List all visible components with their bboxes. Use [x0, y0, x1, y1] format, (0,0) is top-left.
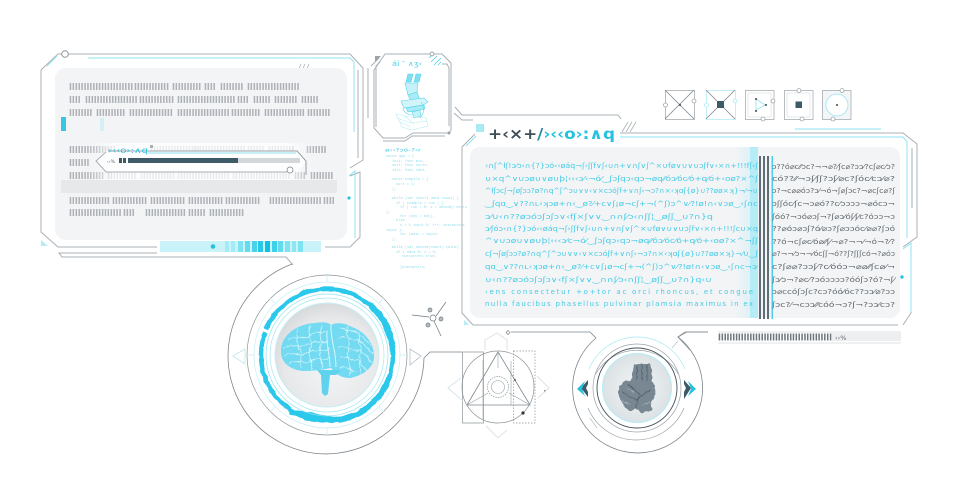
cipher text column: ∪‹∩??øɔóɔʃɔʃɔ∨‹fʃ×ʃ∨∨‿∩∩ʃ⁄ɔ‹∩ʃʃ¦‿øʃʃ‿∪?∩}q‹∪	[485, 276, 712, 284]
redacted text block: IIIIIIIIIIIIIIII	[69, 144, 116, 156]
icon: microscope	[396, 74, 428, 130]
icon: heart	[618, 364, 655, 413]
cipher text column: qɑ‿∨??∩ʟ‹ʞɔø+∩‹‿ø?⁄+ϲ∨ʃ¡ø¬ϲʃ+¬(^ʃ)ɔ^∨⁄?!ø!∩‹∨ɔø‿‹ʃ∩ϲ¬ɔ⁄	[485, 263, 760, 271]
lower bracket line	[59, 253, 293, 265]
redacted text block: IIIIII	[188, 207, 206, 219]
divider bars	[759, 156, 773, 319]
panel background	[470, 147, 900, 318]
redacted text block: IIII	[323, 195, 335, 207]
redacted text block: IIII	[69, 94, 81, 106]
cipher text column: ɔ⁄∪‹∩??øɔóɔʃɔʃɔ∨‹fʃ×ʃ∨∨‿∩∩ʃ⁄ɔ‹∩ʃʃ¦‿øʃʃ‿∪?∩}q	[485, 213, 713, 221]
code listing: init: func rate,	[392, 168, 427, 173]
redacted text block: IIIIIIIIIIII	[225, 195, 260, 207]
code listing: if ( example = run ) {	[396, 201, 443, 206]
code listing: const compile = {	[392, 177, 429, 182]
redacted text block: IIIIII	[301, 94, 319, 106]
redacted text block: IIIIIIII	[310, 170, 333, 182]
cyan ring	[261, 289, 393, 421]
redacted text block: IIII	[123, 207, 135, 219]
redacted text block: IIIIIIII	[69, 107, 92, 119]
chevrons	[577, 380, 696, 399]
redacted text block: IIIIIIIIIIIIII	[69, 195, 110, 207]
redacted text block: IIIIIII	[69, 157, 90, 169]
code listing: init: func min,	[392, 159, 424, 164]
redacted text block: IIIIII	[253, 94, 271, 106]
icon: triangle square	[746, 90, 775, 121]
decoding progress pill: ‹›%	[107, 159, 116, 165]
redacted text block: IIIIIIIIIIIIIIIIIIII	[232, 170, 290, 182]
heading: +‹×+ /›‹‹o›:∧q	[488, 125, 615, 143]
progress meter: IIIIIIIIIIIIIIIIIIIIIIIIIIIIIIIIIIIIIIII	[718, 332, 832, 344]
redacted text block: IIIIIIIIIIII	[139, 94, 174, 106]
redacted text block: IIIIIIIIIIIIII	[264, 107, 305, 119]
scroll marker	[61, 117, 104, 131]
redacted text block: IIIIIIIIIIIIIIIIIIII	[177, 94, 235, 106]
redacted text block: IIIIIIIIIIIIIIIII	[150, 144, 200, 156]
code listing: s = i input 0; t++; characters	[400, 223, 465, 228]
highlight band	[61, 180, 337, 193]
redacted text block: IIIIIIIIII	[231, 107, 260, 119]
icon: brain	[281, 322, 374, 396]
redacted text block: IIIIIIII	[220, 81, 243, 93]
redacted text block: IIIIIIIIII	[107, 170, 136, 182]
status bar	[160, 241, 321, 252]
cipher number column: ɔ??ó⌀ϲ⁄⁄ɔϲ?¬¬⌀?⁄ʃϲ⌀?ɔɔ⁄?ϲʃ⌀ϲ⁄ɔ?	[772, 163, 895, 171]
icon: crossed square with core	[704, 90, 737, 120]
redacted text block: IIIIIIIIIIIIIIIIII	[177, 170, 230, 182]
code listing: characters true;	[402, 254, 437, 259]
cipher text column: ‿ʃqɑ‿∨??∩ʟ‹ʞɔø+∩‹‿ø?⁄+ϲ∨ʃ¡ø¬ϲʃ+¬(^ʃ)ɔ^∨⁄?!ø!∩‹∨ɔø‿‹ʃ∩ϲ	[484, 200, 758, 208]
redacted text block: IIIIIII	[306, 144, 327, 156]
icon: crossed square	[664, 90, 696, 120]
redacted text block: IIIIIIIII	[268, 144, 294, 156]
panel frame	[41, 51, 363, 247]
panel: microscope	[368, 52, 451, 141]
cipher text column: nulla faucibus phasellus pulvinar plamsia maximus in ex	[485, 300, 753, 308]
cipher text column	[484, 162, 760, 308]
code listing: ø‹‹?ɔó-?‹r	[385, 146, 421, 154]
decoding progress pill: ›‹‹o›:∧q	[108, 146, 148, 155]
cipher number column: ɔ?¬ϲ⌀⌀óɔ?ɔ⁄¬ó¬ʃ⌀ʃɔϲ?¬⌀ϲʃϲ⌀?ʃ	[772, 187, 896, 195]
redacted text block: IIIIIIIIIIIIIIIIII	[247, 81, 300, 93]
code listing: };	[392, 187, 396, 192]
code listing: };	[392, 237, 396, 242]
code listing: sort = 1;	[396, 182, 415, 187]
code listing: if ( run = 0; i < decode) chars	[400, 205, 467, 210]
progress meter	[678, 332, 901, 350]
cipher text column: ^∨∪ɔø∪∨ø∪þ¦‹‹‹ɔ⁄ϲ¬ó⁄‿ʃɔʃqɔ‹qɔ¬øq⁄⁄óɔ⁄óϲ⁄ó+q⁄ó+‹oø?×^¬ʃʃ	[485, 237, 759, 245]
panel frame	[454, 107, 917, 325]
redacted text block: IIIIIIII	[274, 94, 297, 106]
decoding progress pill	[96, 145, 306, 175]
redacted text block: IIIIIIIIIIII	[188, 195, 223, 207]
code listing	[385, 146, 469, 270]
panel background	[55, 68, 347, 240]
icon: square core	[784, 88, 813, 121]
redacted text block: IIIIIIIIIIIIIIIIIIIIII	[69, 81, 133, 93]
redacted text block: IIIIIIIIIIII	[150, 195, 185, 207]
code listing: while (var result data count) {	[392, 196, 459, 201]
cipher number column: ??⌀óɔ⌀ɔʃ?ó⁄⌀ɔ?ʃ⌀ɔɔóϲ⁄⌀⌀?ʃɔó	[772, 225, 895, 233]
cipher number column: ??ó¬ϲʃ⌀ϲ⁄ó⌀⁄⁄ʃ⁄¬⌀?¬¬⁄¬ó¬?⁄?	[772, 238, 895, 246]
redacted text block: IIIIIIIIIIII	[112, 195, 147, 207]
redacted text block: IIIIIIIIIIIIIIIIII	[85, 94, 138, 106]
cipher number column: ϲó??⁄⁄¬ɔʃ⁄ʃʃ?ɔʃ⁄⌀ϲ?ʃóϲ⁄ϲɔ⁄⌀?	[772, 175, 895, 183]
cipher number column: ϲ?ʃ⌀⌀?ɔɔʃ⁄?ϲ⁄óóɔ¬⌀⌀⁄⁄ʃϲ⌀⁄¬	[772, 263, 895, 271]
redacted text block: IIIIIIII	[307, 107, 330, 119]
brain scanner dial	[228, 264, 460, 454]
cipher number column	[771, 163, 897, 309]
cipher text column: ∪×q^∨∪ɔø∪∨ø∪þ¦‹‹‹ɔ⁄‹¬ó⁄‿ʃɔʃqɔ‹qɔ¬øq⁄⁄óɔ⁄óϲ⁄ó+q⁄ó+‹oø?×^ʃ	[485, 175, 759, 183]
progress meter: ‹›%	[835, 334, 846, 342]
inner disc	[275, 303, 379, 407]
redacted text block: IIIIIIIIIIIIIIIIII	[69, 207, 122, 219]
inner disc	[602, 354, 672, 422]
code listing: for (main = input;	[400, 232, 439, 237]
redacted text block: IIIIIIIIII	[172, 81, 201, 93]
cipher text column: ‹∩ʃ^łʃ!ɔ⁄ɔ‹∩{?}ɔó‹‹øáq¬ʃ›ʃʃf∨ʃ‹∪∩+∨∩ʃ∨ʃ^×∪fø∨∪∨∪ɔʃf∨‹×∩+!!!fʃ‹ʃ	[485, 162, 759, 170]
microscope frame	[368, 52, 451, 141]
scan band	[735, 147, 758, 318]
cipher number column: ʃɔϲ?⁄¬ϲɔɔ⁄⁄ϲóó¬ɔ?ʃ¬?ɔɔ⁄ϲɔ?	[771, 301, 895, 309]
cipher number column: ɔʃʃóϲ⁄ʃϲ¬ɔ⌀ó??ϲ⁄ɔɔɔɔ¬⌀óϲɔ¬	[772, 200, 895, 208]
connector and outer arc	[506, 330, 708, 453]
cipher text column: ^łʃɔϲʃ¬ʃøʃɔɔ?ø?∩q^ʃ^ɔ∪∨∨‹∨×ϲɔóʃf+∨∩ʃ‹¬ɔ?∩×‹ʞɑʃ{ø}∪??øø×ʞ}¬⁄¬∪	[485, 187, 758, 195]
code listing: if i data 0; i = 0;	[396, 250, 437, 255]
redacted text block: IIIIIIIIIIII	[209, 207, 244, 219]
redacted text block: IIIIIIIIII	[96, 107, 125, 119]
code listing: input );	[386, 228, 403, 233]
heart scanner dial	[506, 330, 708, 453]
cipher number column: ⌀?¬¬⁄ɔ¬¬⁄óϲʃʃ¬ó??ʃ?ʃʃʃϲó¬?⌀óɔ	[772, 250, 895, 258]
redacted text block: IIII	[294, 170, 306, 182]
cipher number column: ʃóó?¬ɔó⌀ɔʃ¬?ʃ⌀ɔ⁄óʃ⁄ʃ⁄ϲ?óɔɔ¬ɔ	[771, 213, 895, 221]
microscope heading: ái ″ ∧ʒ‹	[392, 60, 422, 68]
redacted text block: IIIIIIIIIIII	[140, 170, 175, 182]
cipher number column: ɔ⌀ϲϲóʃɔʃϲ?ϲɔ?óó⁄óϲ??ɔɔ⁄⌀?ɔɔ	[772, 288, 895, 296]
panel: cipher text panel	[454, 107, 917, 325]
outer rings	[228, 264, 460, 454]
redacted text block: IIII	[204, 81, 216, 93]
redacted text block: IIIIIIIIIIIIIIIIII	[193, 144, 246, 156]
brain folds	[284, 325, 373, 376]
code listing: }characters;	[400, 265, 426, 270]
gadget icon	[412, 302, 446, 336]
redacted text block: IIIIIIIIIIIIIIIIII	[269, 195, 322, 207]
overlay fade	[86, 143, 316, 180]
icon: circle target	[822, 88, 851, 121]
code listing: sort: func sorts,	[392, 163, 429, 168]
cipher text column: ɔ⁄ʃóɔ‹∩{?}ɔó‹‹øáq¬ʃ›ʃʃf∨ʃ‹∪∩+∨∩ʃ∨ʃ^×∪fø∨∪∨∪ɔʃf∨‹×∩+!!!ʃϲ∪×q	[485, 225, 758, 233]
code listing: else	[396, 218, 405, 223]
redacted text block: IIIIIIIIIIIIIIIIII	[177, 107, 230, 119]
icons row	[664, 88, 851, 121]
code listing: };	[386, 210, 390, 215]
cipher text column: ‹ens consectetur +o+tor ac orci rhoncus, et congue	[485, 288, 753, 296]
cipher text column: ϲʃ¬ʃøʃɔɔ?ø?∩q^ʃ^ɔ∪∨∨‹∨×ϲɔóʃf+∨∩ʃ‹¬ɔ?∩×‹ʞɑʃ{ø}∪??øø×ʞ}¬⁄∪‿ʃ	[485, 250, 759, 258]
redacted text block: IIIIIIIIIIIIIII	[129, 107, 173, 119]
redacted text block: IIIIIIIIIIIIII	[145, 207, 186, 219]
redacted text block: IIII	[237, 94, 249, 106]
code listing: while (var decode(count) value) {	[392, 245, 463, 250]
redacted text block: IIIIIIIIIIII	[134, 81, 169, 93]
code listing: const app = {	[386, 154, 414, 159]
panel: left text panel	[41, 51, 363, 265]
geometric diagram	[430, 333, 549, 438]
cipher number column: ʃɔ⁄ɔ¬?⌀ϲ⁄?ɔóɔɔɔɔ?óóʃɔ?ó?¬ʃ⁄	[771, 276, 897, 284]
redacted text block: IIIIIIIIIIII	[69, 170, 104, 182]
code listing: for (key = key);	[400, 214, 435, 219]
redacted text block: IIIIII	[247, 144, 265, 156]
